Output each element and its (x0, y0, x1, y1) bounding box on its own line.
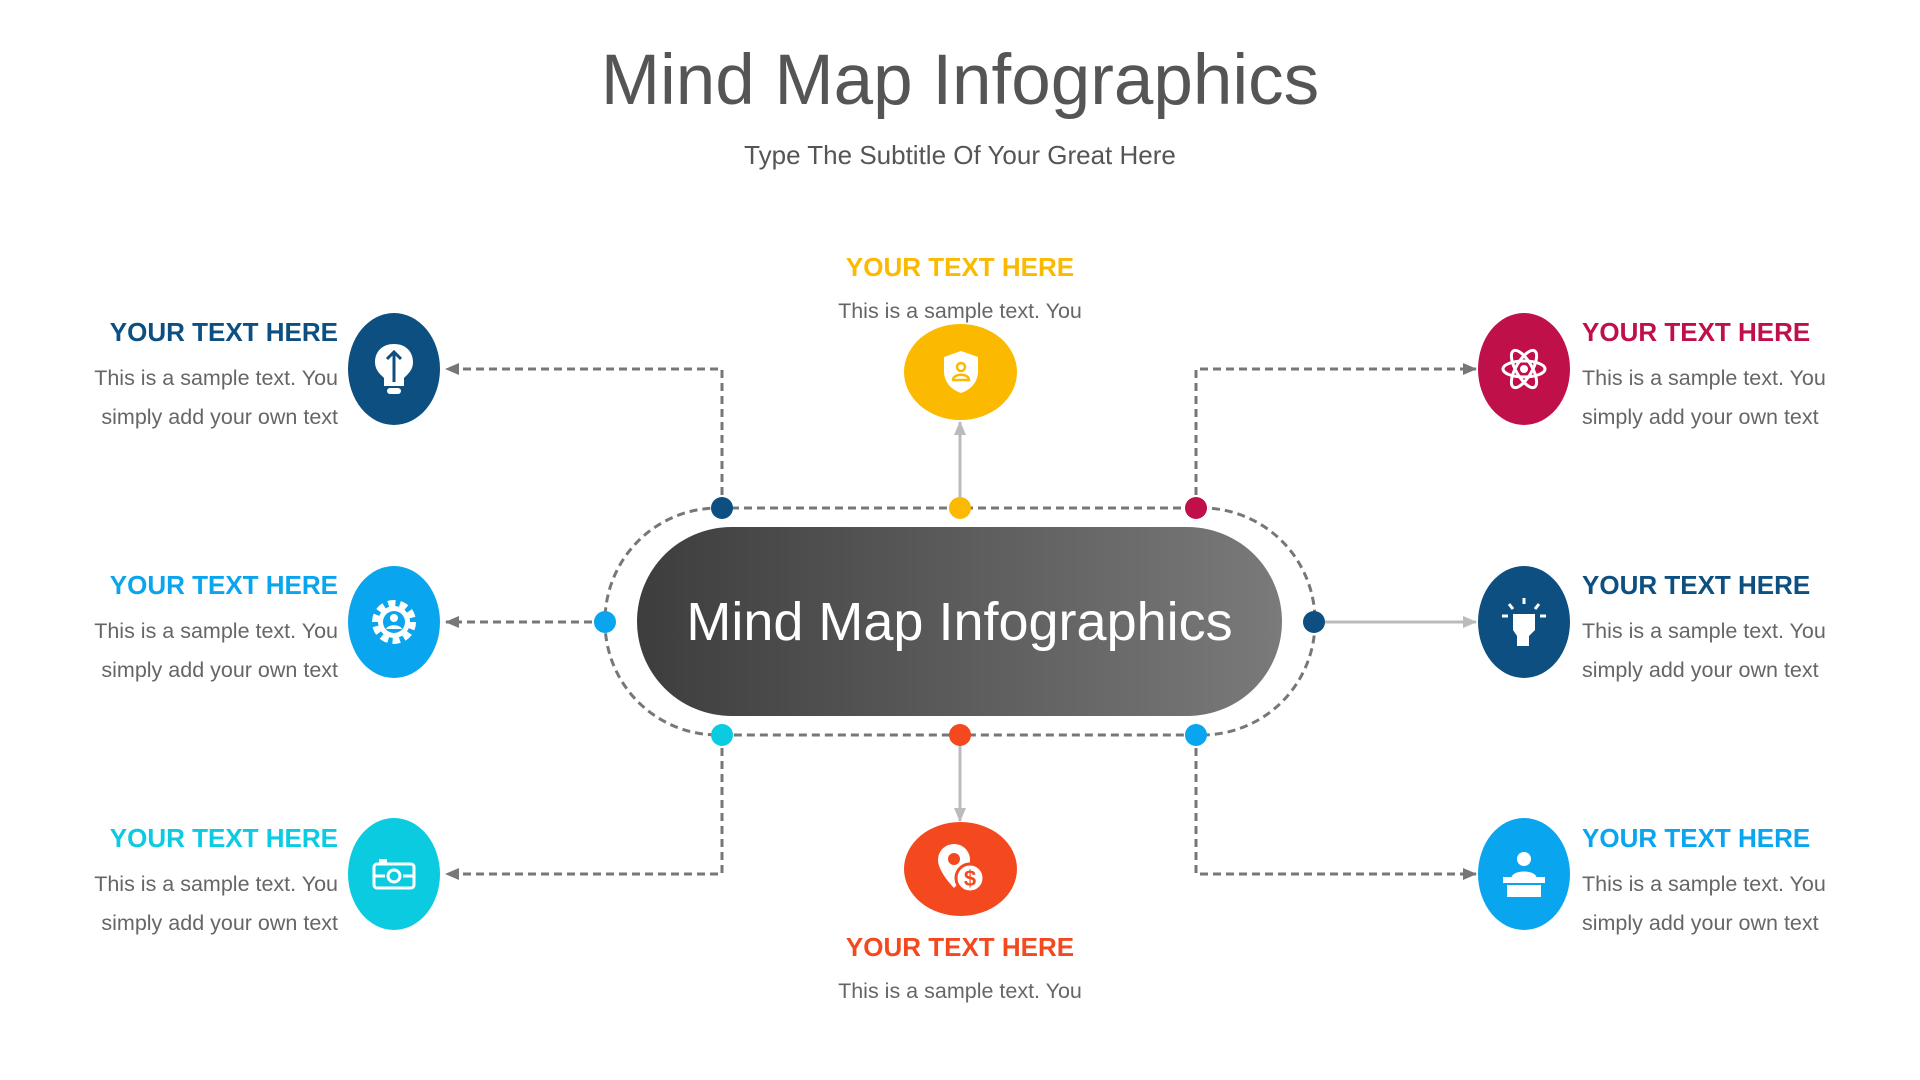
item right 3: YOUR TEXT HERE (1582, 823, 1810, 853)
item left 2: YOUR TEXT HERE (110, 570, 338, 600)
icon: location dollar (904, 822, 1017, 916)
item left 1: YOUR TEXT HERE (110, 317, 338, 347)
item top (838, 252, 1082, 323)
item right 1: YOUR TEXT HERE (1582, 317, 1810, 347)
item left 1: This is a sample text. You (94, 366, 338, 390)
item left 3: YOUR TEXT HERE (110, 823, 338, 853)
item right 2: This is a sample text. You (1582, 619, 1826, 643)
icon: atom (1478, 313, 1570, 425)
item top: YOUR TEXT HERE (846, 252, 1074, 282)
subtitle: Type The Subtitle Of Your Great Here (744, 140, 1176, 170)
item left 2 (94, 570, 338, 682)
item left 2: simply add your own text (101, 658, 338, 682)
item bottom: This is a sample text. You (838, 979, 1082, 1003)
item top: This is a sample text. You (838, 299, 1082, 323)
icon: gear (348, 566, 440, 678)
item bottom: YOUR TEXT HERE (846, 932, 1074, 962)
item right 1 (1582, 317, 1826, 429)
item right 2: YOUR TEXT HERE (1582, 570, 1810, 600)
item left 3 (94, 823, 338, 935)
item right 3: simply add your own text (1582, 911, 1819, 935)
central pill (637, 527, 1282, 716)
icon: shield (904, 324, 1017, 420)
icon: brain (348, 313, 440, 425)
item right 1: simply add your own text (1582, 405, 1819, 429)
icon: fist (1478, 566, 1570, 678)
item right 1: This is a sample text. You (1582, 366, 1826, 390)
icon: location dollar: $ (963, 866, 976, 891)
icon: camera (348, 818, 440, 930)
item right 2 (1582, 570, 1826, 682)
item left 1: simply add your own text (101, 405, 338, 429)
title: Mind Map Infographics (601, 41, 1319, 120)
item right 3 (1582, 823, 1826, 935)
item right 3: This is a sample text. You (1582, 872, 1826, 896)
item bottom (838, 932, 1082, 1003)
central pill: Mind Map Infographics (686, 592, 1233, 652)
icon: speaker podium (1478, 818, 1570, 930)
item left 3: This is a sample text. You (94, 872, 338, 896)
item right 2: simply add your own text (1582, 658, 1819, 682)
item left 2: This is a sample text. You (94, 619, 338, 643)
item left 1 (94, 317, 338, 429)
item left 3: simply add your own text (101, 911, 338, 935)
